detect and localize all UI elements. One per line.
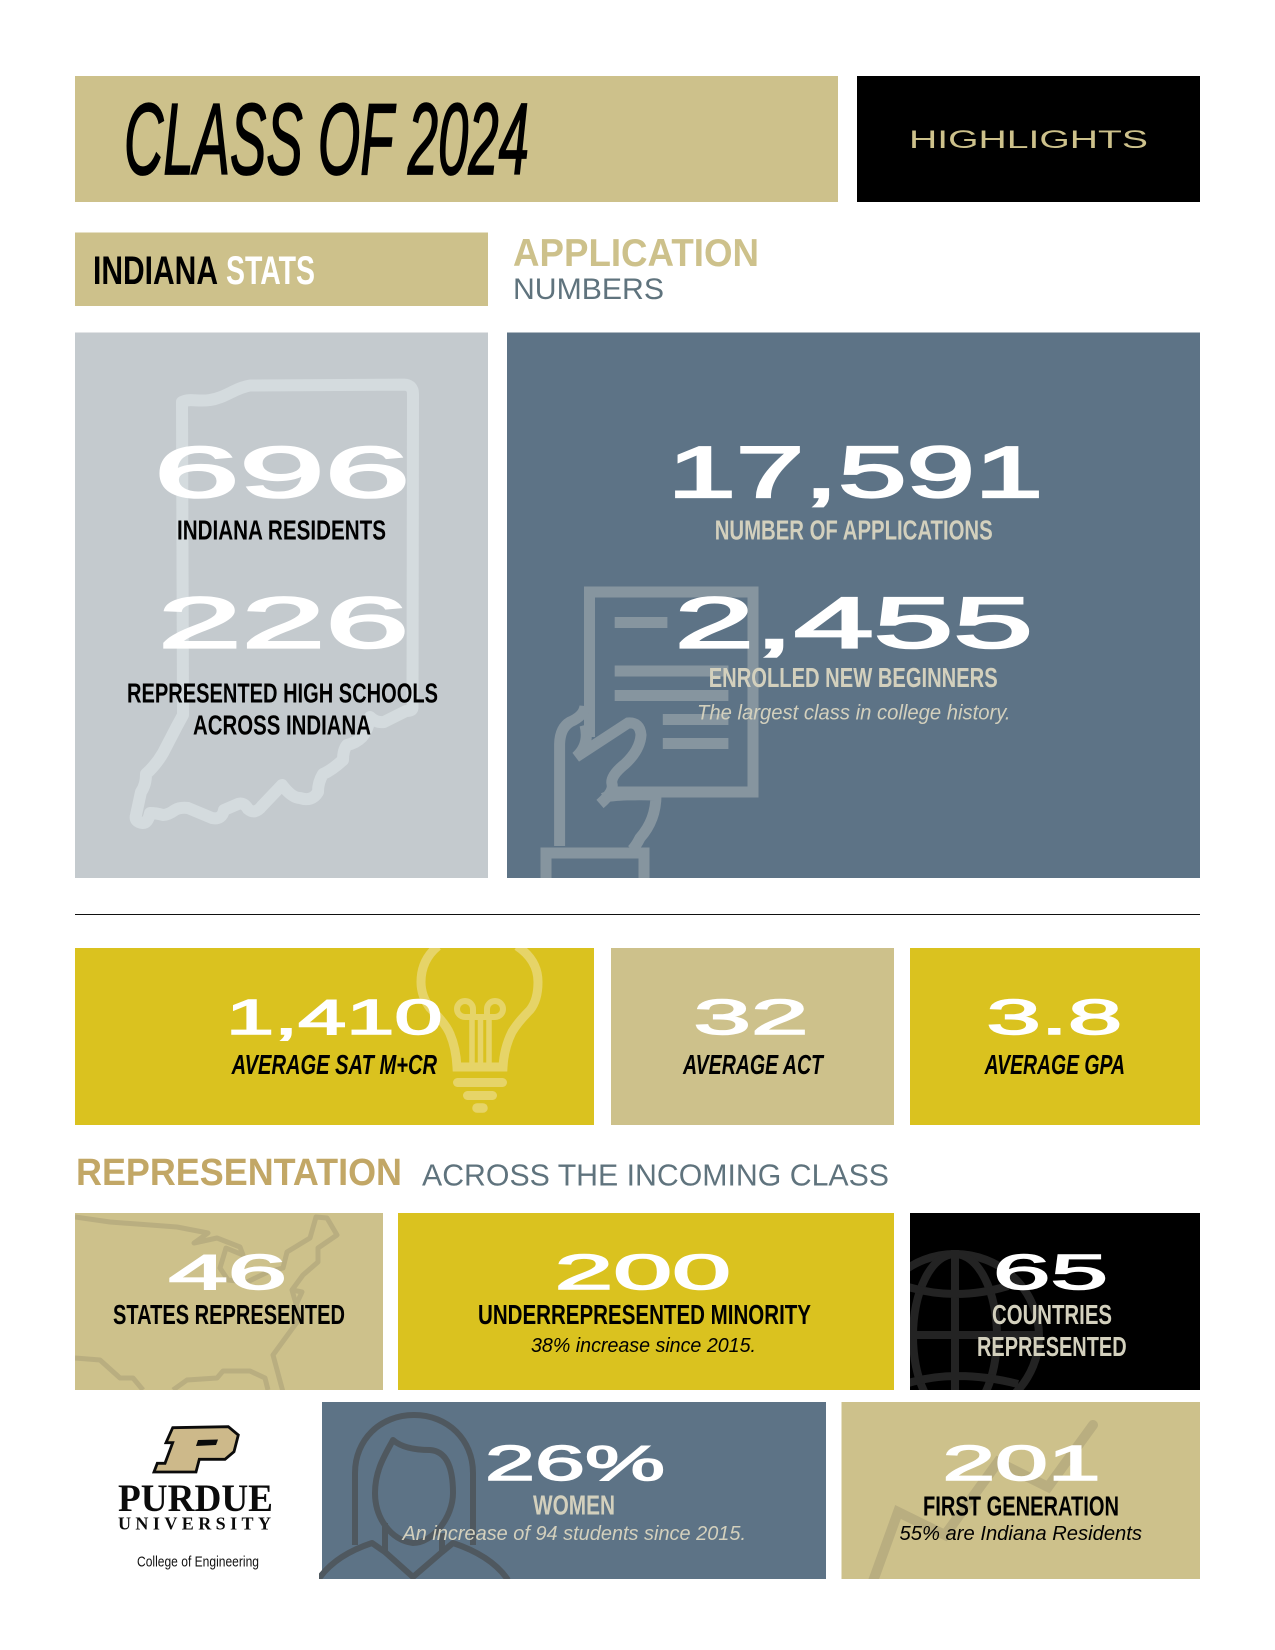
panel: countries represented xyxy=(910,1213,1200,1390)
logo: Purdue University xyxy=(118,1427,273,1571)
icon: light bulb xyxy=(421,946,538,1108)
text: College of Engineering: College of Engineering xyxy=(137,1554,259,1571)
icon: woman silhouette xyxy=(318,1415,508,1580)
stat: 3.8: 3.8 xyxy=(986,990,1122,1045)
heading: Indiana stats: INDIANA xyxy=(93,249,218,293)
stat: 32: 32 xyxy=(694,990,808,1045)
highlights tag xyxy=(857,76,1200,202)
stat: 200: 200 xyxy=(554,1245,731,1300)
title: CLASS OF 2024 xyxy=(124,84,529,196)
label: states represented: STATES REPRESENTED xyxy=(113,1299,345,1330)
note: Indiana residents: 55% are Indiana Residents xyxy=(900,1523,1142,1545)
note: 94 students: An increase of 94 students since 2015. xyxy=(402,1523,746,1545)
highlights tag: HIGHLIGHTS xyxy=(909,126,1148,154)
label: average ACT: AVERAGE ACT xyxy=(682,1049,825,1080)
title banner xyxy=(75,76,838,202)
heading: application numbers: NUMBERS xyxy=(513,273,664,306)
label: average GPA: AVERAGE GPA xyxy=(984,1049,1125,1080)
heading: representation xyxy=(76,1152,889,1194)
heading: Indiana stats: STATS xyxy=(226,249,315,293)
stat: 226: 226 xyxy=(158,584,409,664)
icon: Purdue P xyxy=(154,1427,238,1472)
stat: 65: 65 xyxy=(993,1245,1108,1300)
label: represented high schools: REPRESENTED HIGH SCHOOLS xyxy=(127,678,438,708)
icon: trend line xyxy=(872,1425,1093,1584)
stat: 1,410: 1,410 xyxy=(226,990,442,1045)
icon: US map xyxy=(75,1217,337,1392)
note: largest class: The largest class in college history. xyxy=(697,702,1010,724)
heading: application numbers: APPLICATION xyxy=(513,232,759,275)
label: underrepresented minority: UNDERREPRESENTED MINORITY xyxy=(478,1299,811,1330)
panel: Indiana stats xyxy=(75,332,488,878)
panel: states represented xyxy=(75,1213,383,1392)
panel: application numbers xyxy=(507,332,1200,880)
label: represented: REPRESENTED xyxy=(977,1331,1127,1362)
heading: representation: REPRESENTATION xyxy=(76,1152,402,1194)
panel: average SAT xyxy=(75,946,594,1125)
stat: 17,591: 17,591 xyxy=(668,433,1043,513)
panel: women xyxy=(318,1402,826,1580)
heading: Indiana stats xyxy=(75,232,488,306)
heading: representation: ACROSS THE INCOMING CLASS xyxy=(422,1158,889,1192)
label: Indiana residents: INDIANA RESIDENTS xyxy=(177,514,386,546)
icon: hand holding document xyxy=(546,592,753,880)
stat: 2,455: 2,455 xyxy=(674,584,1033,664)
stat: 26%: 26% xyxy=(485,1436,665,1491)
label: average SAT: AVERAGE SAT M+CR xyxy=(231,1049,438,1080)
label: women: WOMEN xyxy=(533,1490,615,1521)
panel: first generation xyxy=(842,1402,1200,1584)
panel: average ACT xyxy=(611,948,894,1125)
label: countries: COUNTRIES xyxy=(992,1299,1112,1330)
wordmark: Purdue: PURDUE xyxy=(118,1477,273,1520)
heading: application numbers xyxy=(513,232,759,306)
label: across Indiana: ACROSS INDIANA xyxy=(193,710,371,740)
panel: average GPA xyxy=(910,948,1200,1125)
label: first generation: FIRST GENERATION xyxy=(923,1491,1119,1522)
wordmark: University: UNIVERSITY xyxy=(118,1513,271,1533)
note: 38% increase: 38% increase since 2015. xyxy=(531,1335,756,1357)
icon: globe xyxy=(910,1250,1043,1390)
label: enrolled new beginners: ENROLLED NEW BEGINNERS xyxy=(709,662,998,693)
stat: 201: 201 xyxy=(942,1436,1100,1491)
stat: 696: 696 xyxy=(154,433,410,513)
icon: Indiana outline xyxy=(136,385,413,823)
stat: 46: 46 xyxy=(168,1245,287,1300)
panel: underrepresented minority xyxy=(398,1213,894,1390)
label: number of applications: NUMBER OF APPLICATIONS xyxy=(715,514,993,546)
